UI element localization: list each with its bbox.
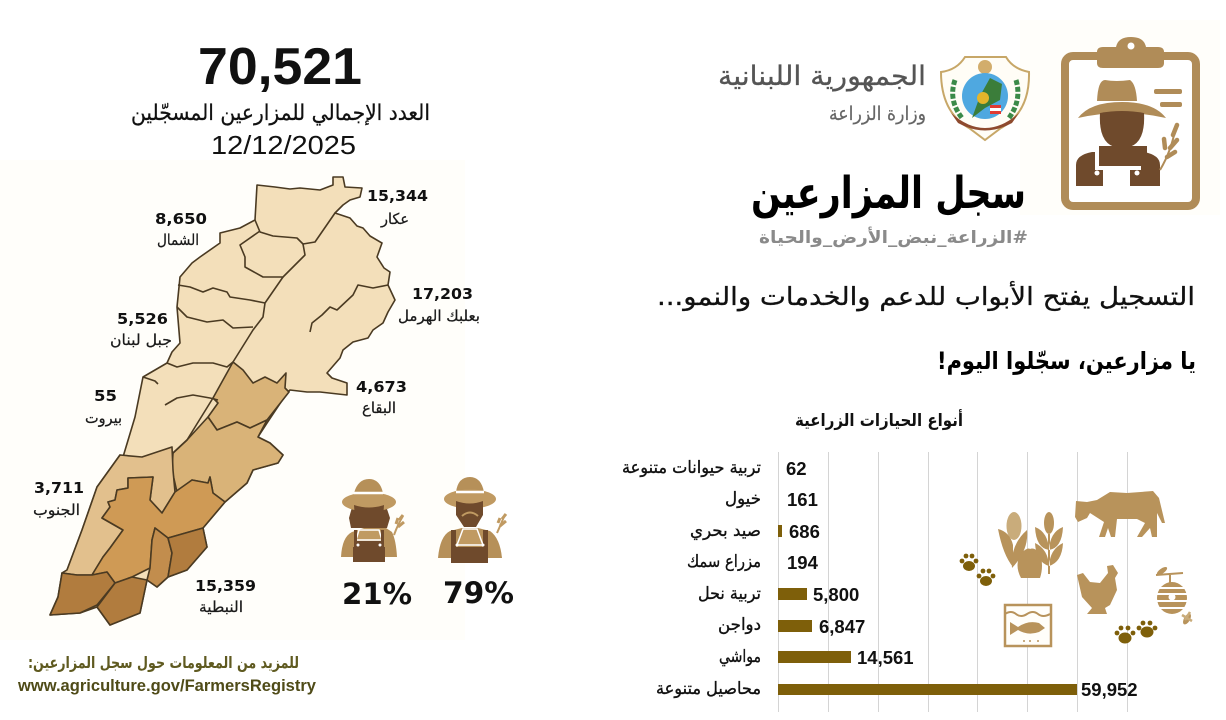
icon: beehive bbox=[1156, 566, 1193, 626]
map: northern and central regions bbox=[50, 177, 395, 625]
chart category labels: صيد بحري bbox=[690, 521, 761, 541]
chart values: 5,800 bbox=[813, 584, 859, 605]
chart values: 161 bbox=[787, 489, 818, 510]
map: South coast bbox=[62, 447, 175, 575]
chart values: 14,561 bbox=[857, 647, 914, 668]
icon: ministry logo bbox=[941, 57, 1029, 140]
chart category labels: تربية نحل bbox=[698, 584, 761, 604]
map: Bint Jbeil bbox=[97, 577, 147, 625]
chart values: 59,952 bbox=[1081, 679, 1138, 700]
map: Marjeyoun bbox=[147, 528, 172, 587]
map labels bbox=[33, 187, 480, 616]
total farmers heading: العدد الإجمالي للمزارعين المسجّلين bbox=[131, 101, 430, 126]
icon: paw prints left bbox=[960, 554, 995, 586]
map labels: الشمال bbox=[157, 231, 199, 249]
chart values: 62 bbox=[786, 458, 807, 479]
icon: crops bbox=[998, 512, 1063, 578]
map labels: النبطية bbox=[199, 598, 243, 616]
total farmers heading: 70,521 bbox=[198, 38, 362, 96]
bar chart: holding types bbox=[622, 452, 1138, 712]
map labels: 5,526 bbox=[117, 310, 168, 328]
gender percentages: 21% bbox=[342, 577, 412, 611]
chart category labels: تربية حيوانات متنوعة bbox=[622, 458, 761, 478]
chart values: 686 bbox=[789, 521, 820, 542]
total farmers heading: 12/12/2025 bbox=[211, 130, 356, 160]
chart values: 6,847 bbox=[819, 616, 865, 637]
chart category labels: خيول bbox=[725, 489, 761, 509]
icon: fish tank bbox=[1005, 605, 1051, 646]
hashtag: #الزراعة_نبض_الأرض_والحياة bbox=[759, 227, 1028, 248]
chart category labels: دواجن bbox=[718, 615, 761, 635]
map: Bekaa south bbox=[208, 362, 289, 430]
map labels: 4,673 bbox=[356, 378, 407, 396]
map: Hasbaya bbox=[168, 528, 207, 577]
chart title: أنواع الحيازات الزراعية bbox=[795, 409, 963, 431]
tagline: التسجيل يفتح الأبواب للدعم والخدمات والنمو... bbox=[657, 280, 1195, 312]
map: South central bbox=[92, 477, 225, 583]
map labels: الجنوب bbox=[33, 501, 80, 519]
gender percentages bbox=[342, 576, 514, 611]
map labels: عكار bbox=[380, 210, 409, 228]
chart values: 194 bbox=[787, 552, 819, 573]
footer: more information: للمزيد من المعلومات حول سجل المزارعين: bbox=[28, 653, 299, 672]
call to action: يا مزارعين، سجّلوا اليوم! bbox=[937, 347, 1196, 375]
map labels: جبل لبنان bbox=[110, 331, 172, 349]
title: سجل المزارعين bbox=[751, 168, 1026, 219]
icon: paw prints right bbox=[1115, 621, 1157, 644]
map labels: 3,711 bbox=[34, 479, 84, 497]
map labels: 15,359 bbox=[195, 577, 256, 595]
map labels: بيروت bbox=[85, 409, 122, 427]
chart category labels: محاصيل متنوعة bbox=[656, 679, 761, 699]
ministry name: الجمهورية اللبنانية bbox=[718, 61, 926, 92]
map labels: 15,344 bbox=[367, 187, 428, 205]
footer: more information bbox=[17, 653, 317, 695]
icon: male farmer bbox=[438, 477, 506, 563]
footer: more information: www.agriculture.gov/FarmersRegistry bbox=[17, 676, 317, 695]
map: Nabatieh north bbox=[172, 417, 283, 502]
chart category labels: مزراع سمك bbox=[687, 552, 761, 572]
ministry name: وزارة الزراعة bbox=[829, 103, 926, 125]
map labels: البقاع bbox=[362, 399, 396, 417]
map labels: 8,650 bbox=[155, 210, 207, 228]
map labels: 17,203 bbox=[412, 285, 473, 303]
icon: cow bbox=[1075, 491, 1165, 537]
total farmers heading bbox=[131, 38, 430, 160]
ministry name bbox=[718, 61, 926, 125]
map labels: 55 bbox=[94, 387, 117, 405]
chart values bbox=[786, 458, 1138, 700]
icon: female farmer bbox=[341, 479, 404, 562]
gender percentages: 79% bbox=[443, 576, 514, 610]
icon: clipboard with farmer bbox=[1065, 37, 1196, 206]
chart bars bbox=[778, 525, 1077, 695]
map of Lebanon by governorate bbox=[50, 177, 395, 625]
map: Tyre bbox=[50, 572, 115, 615]
chart category labels bbox=[622, 458, 761, 699]
chart category labels: مواشي bbox=[719, 647, 761, 667]
map labels: بعلبك الهرمل bbox=[398, 307, 480, 325]
icon: hen bbox=[1077, 565, 1118, 614]
